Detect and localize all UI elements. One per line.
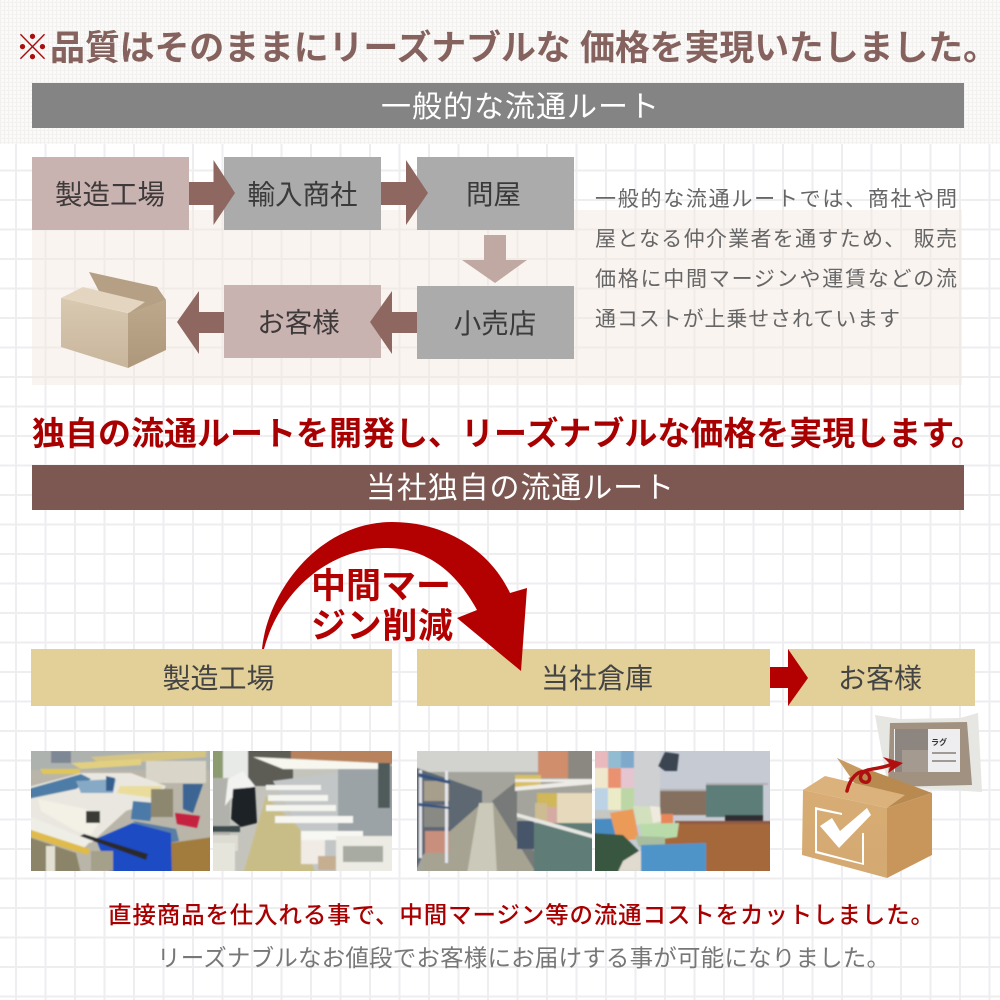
heading band: general route: 一般的な流通ルート xyxy=(381,91,659,124)
arrow: margin cut curve xyxy=(262,522,527,671)
label: margin cut: ジン削減 xyxy=(311,607,453,646)
arrow: customer to parcel xyxy=(177,291,224,354)
step: warehouse xyxy=(417,649,770,706)
step: wholesaler: 問屋 xyxy=(466,179,521,210)
arrow: factory to importer xyxy=(189,160,235,225)
label: margin cut: 中間マー xyxy=(311,567,451,606)
step: customer: お客様 xyxy=(257,307,340,338)
step: retailer: 小売店 xyxy=(454,308,536,339)
step: importer xyxy=(224,157,381,230)
photo: factory floor xyxy=(213,751,392,871)
text block: red summary: 直接商品を仕入れる事で、中間マージン等の流通コストをカットしました。 xyxy=(108,902,934,928)
label: margin cut xyxy=(311,567,453,646)
icon: parcel xyxy=(61,272,166,368)
step: wholesaler xyxy=(417,157,574,230)
photo: sewing tables xyxy=(31,751,210,871)
arrow: into box xyxy=(847,757,903,791)
heading band: our route xyxy=(32,465,964,510)
title: ※ xyxy=(15,29,50,68)
arrow: retailer to customer xyxy=(370,291,417,354)
step: factory: 製造工場 xyxy=(55,179,165,210)
text block: general route description: 屋となる仲介業者を通すため、 販売 xyxy=(595,228,957,251)
title: 品質はそのままにリーズナブルな 価格を実現いたしました。 xyxy=(50,28,998,68)
panel: general route flow xyxy=(32,157,574,368)
photo: warehouse aisle xyxy=(417,751,592,871)
icon: cardboard box with check xyxy=(802,758,932,878)
step: retailer xyxy=(417,286,574,359)
step: factory xyxy=(32,157,189,230)
heading band: general route xyxy=(32,83,964,128)
step: importer: 輸入商社 xyxy=(248,179,358,210)
text block: general route description: 価格に中間マージンや運賃などの流 xyxy=(595,268,957,291)
text block: general route description xyxy=(595,188,957,331)
step: factory xyxy=(31,649,392,706)
text block: general route description: 一般的な流通ルートでは、商社や問 xyxy=(595,188,957,211)
arrow: warehouse to customer xyxy=(770,649,808,706)
step: customer xyxy=(224,285,381,358)
arrow: wholesaler to retailer xyxy=(462,235,527,283)
heading: original route: 独自の流通ルートを開発し、リーズナブルな価格を実現します。 xyxy=(32,415,984,452)
arrow: importer to wholesaler xyxy=(381,160,428,225)
text block: general route description: 通コストが上乗せされています xyxy=(595,308,900,331)
step: customer: お客様 xyxy=(838,663,922,694)
step: customer xyxy=(788,649,975,706)
text block: gray summary: リーズナブルなお値段でお客様にお届けする事が可能になりました。 xyxy=(157,945,890,971)
step: factory: 製造工場 xyxy=(162,663,275,694)
icon: package: ラグ xyxy=(931,737,947,747)
panel: general route background xyxy=(32,210,962,385)
icon: package xyxy=(875,713,982,792)
photo: showroom xyxy=(595,751,770,871)
step: warehouse: 当社倉庫 xyxy=(541,663,653,694)
heading band: our route: 当社独自の流通ルート xyxy=(366,472,674,505)
